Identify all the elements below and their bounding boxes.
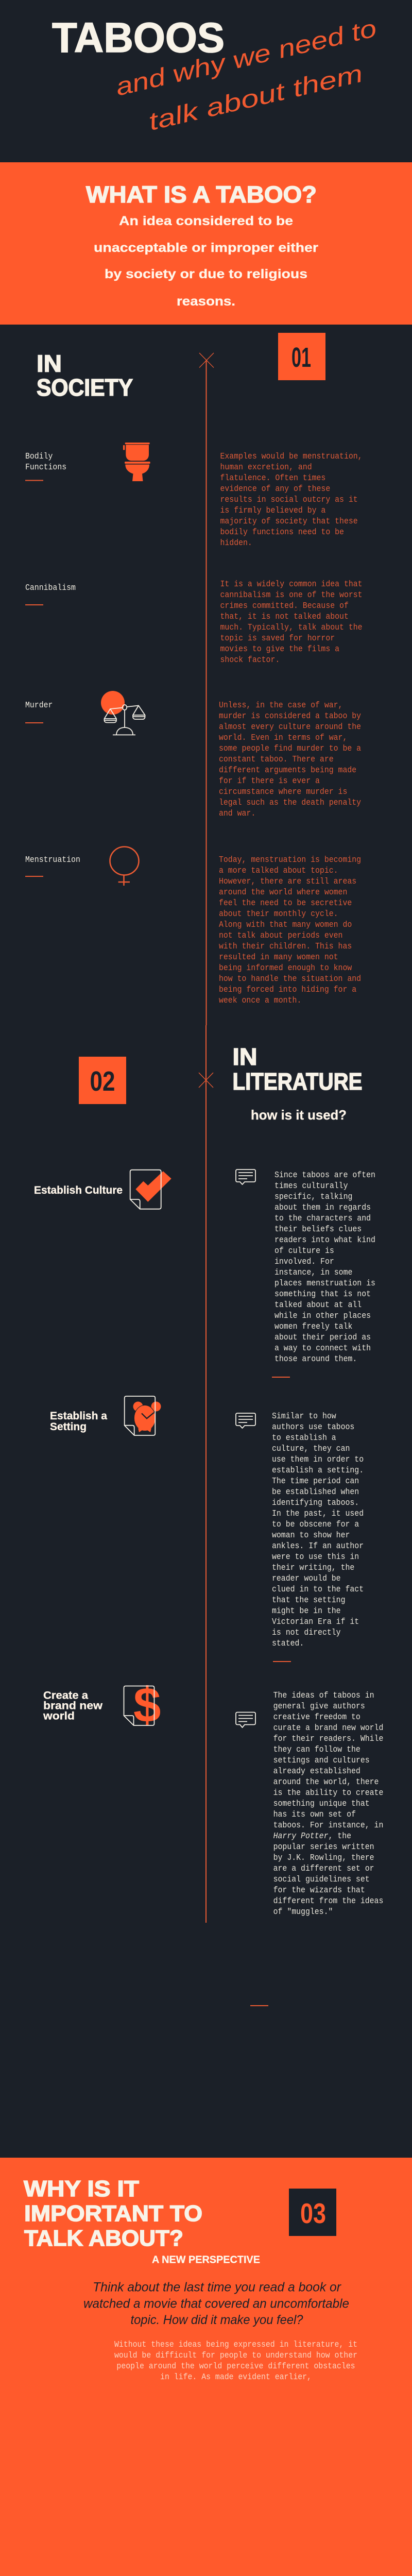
text: create a brand new world: general give authors [273, 1701, 365, 1711]
heading: why is it important: TALK ABOUT? [24, 2226, 183, 2251]
icon: toilet [123, 443, 150, 481]
icon: document with check [130, 1170, 171, 1209]
icon: venus symbol [110, 847, 139, 886]
badge 03 [289, 2189, 336, 2236]
dash [25, 604, 43, 605]
icon: chat bubble 2 [236, 1413, 255, 1428]
text: create a brand new world: for their readers. While [273, 1734, 383, 1743]
label: create a brand new world [43, 1690, 103, 1722]
panel: what is a taboo [0, 162, 412, 325]
title: TABOOS: TABOOS [52, 14, 225, 61]
text: murder: almost every culture around the [219, 722, 361, 732]
label: create a brand new world: Create a [43, 1690, 88, 1701]
text: establish culture: Since taboos are often [274, 1170, 375, 1180]
text: bodily functions: Examples would be menstruation, [220, 451, 363, 461]
badge 02: 02 [90, 1066, 115, 1097]
label: establish culture: Establish Culture [34, 1184, 123, 1196]
text: establish a setting: were to use this in [272, 1552, 359, 1562]
heading: why is it important: WHY IS IT [24, 2176, 139, 2201]
text: establish a setting: might be in the [272, 1606, 341, 1616]
heading: why is it important: IMPORTANT TO [24, 2201, 202, 2226]
label: establish a setting: Establish a [50, 1410, 107, 1422]
text: create a brand new world: taboos. For instance, in [273, 1820, 383, 1830]
text: murder: murder is considered a taboo by [219, 711, 361, 721]
closing text: would be difficult for people to understand how other [114, 2350, 357, 2360]
text: establish a setting: stated. [272, 1638, 304, 1648]
text: create a brand new world: by J.K. Rowling, there [273, 1853, 374, 1862]
text: menstruation: week once a month. [219, 995, 301, 1005]
subheading: how is it used: how is it used? [251, 1107, 347, 1123]
badge 01 [278, 333, 325, 380]
text: menstruation: about their monthly cycle. [219, 909, 338, 919]
text: create a brand new world: is the ability to create [273, 1788, 383, 1798]
text: establish culture: women freely talk [274, 1321, 352, 1331]
text: establish culture: a way to connect with [274, 1343, 371, 1353]
closing text: people around the world perceive different obstacles [116, 2361, 355, 2371]
definition text: by society or due to religious [105, 267, 307, 281]
dash [250, 2005, 268, 2006]
text: menstruation: with their children. This has [219, 941, 352, 951]
text: create a brand new world: of "muggles." [273, 1907, 333, 1917]
text: establish culture: those around them. [274, 1354, 357, 1364]
text: establish a setting: clued in to the fact [272, 1584, 364, 1594]
definition text: reasons. [177, 294, 235, 309]
text: establish culture: of culture is [274, 1246, 334, 1256]
dash [25, 722, 43, 723]
badge 03: 03 [300, 2197, 326, 2229]
subheading: a new perspective: A NEW PERSPECTIVE [152, 2255, 260, 2266]
text: establish a setting: establish a setting. [272, 1465, 364, 1475]
text: bodily functions: bodily functions need to be [220, 527, 344, 537]
text: murder: some people find murder to be a [219, 743, 361, 753]
text: murder: Unless, in the case of war, [219, 700, 342, 710]
text: create a brand new world: different from the ideas [273, 1896, 383, 1906]
label: menstruation: Menstruation [25, 855, 80, 865]
text: cannibalism: much. Typically, talk about the [220, 622, 363, 632]
text: establish a setting: woman to show her [272, 1530, 350, 1540]
text: menstruation: Along with that many women do [219, 920, 352, 929]
timeline vertical line [205, 360, 207, 1923]
text: create a brand new world: , the [328, 1831, 351, 1841]
text: establish culture: talked about at all [274, 1300, 362, 1310]
text: establish culture: while in other places [274, 1311, 371, 1320]
text: create a brand new world: social guidelines set [273, 1874, 370, 1884]
heading: in society: IN [37, 350, 62, 377]
text: create a brand new world: has its own set of [273, 1809, 356, 1819]
text: create a brand new world: curate a brand new world [273, 1723, 383, 1733]
text: establish a setting: The time period can [272, 1476, 359, 1486]
definition text: An idea considered to be [119, 214, 293, 228]
text: murder: world. Even in terms of war, [219, 733, 347, 742]
text: establish a setting: culture, they can [272, 1444, 350, 1453]
icon: chat bubble 3 [236, 1713, 255, 1727]
text: bodily functions: human excretion, and [220, 462, 312, 472]
icon: document with dollar: $ [133, 1677, 161, 1733]
text: bodily functions: evidence of any of these [220, 484, 330, 494]
panel: dark body [0, 325, 412, 2158]
text: menstruation: Today, menstruation is becoming [219, 855, 361, 865]
handwritten question: watched a movie that covered an uncomfortable [83, 2297, 349, 2311]
text: create a brand new world: The ideas of taboos in [273, 1690, 374, 1700]
text: create a brand new world: creative freedom to [273, 1712, 360, 1722]
text: menstruation: However, there are still areas [219, 876, 356, 886]
icon: chat bubble 1 [236, 1170, 255, 1184]
icon: timeline cross 2 [199, 1073, 213, 1088]
text: cannibalism: crimes committed. Because of [220, 601, 349, 611]
label: cannibalism: Cannibalism [25, 583, 76, 592]
text: establish a setting: identifying taboos. [272, 1498, 359, 1507]
text: establish a setting: reader would be [272, 1573, 341, 1583]
text: menstruation: being forced into hiding for a [219, 985, 356, 994]
text: establish culture: places menstruation is [274, 1278, 375, 1288]
text: establish a setting: In the past, it used [272, 1509, 364, 1518]
text: establish culture: their beliefs clues [274, 1224, 362, 1234]
text: bodily functions: results in social outcry as it [220, 495, 358, 504]
text: establish culture: readers into what kind [274, 1235, 375, 1245]
heading: in literature: IN [233, 1043, 258, 1070]
text: establish culture: to the characters and [274, 1213, 371, 1223]
text: menstruation: not talk about periods even [219, 930, 342, 940]
text: establish culture: about them in regards [274, 1202, 371, 1212]
text: create a brand new world: around the world, there [273, 1777, 379, 1787]
text: establish a setting: to establish a [272, 1433, 336, 1443]
label: establish a setting [50, 1410, 107, 1433]
closing text: Without these ideas being expressed in literature, it [114, 2340, 357, 2349]
text: establish a setting: to be obscene for a [272, 1519, 359, 1529]
badge 02 [79, 1057, 126, 1104]
text: menstruation: resulted in many women not [219, 952, 338, 962]
text: menstruation: around the world where women [219, 887, 347, 897]
label: bodily functions: Bodily [25, 451, 53, 461]
handwritten question: topic. How did it make you feel? [131, 2313, 303, 2327]
text: murder: different arguments being made [219, 765, 356, 775]
label: murder: Murder [25, 700, 53, 710]
text: establish culture: instance, in some [274, 1267, 352, 1277]
definition text: unacceptable or improper either [94, 241, 318, 255]
text: establish a setting: use them in order to [272, 1454, 364, 1464]
text: create a brand new world: popular series written [273, 1842, 374, 1852]
heading: what is a taboo: WHAT IS A TABOO? [86, 181, 317, 208]
heading: why is it important [24, 2176, 202, 2251]
text: cannibalism: cannibalism is one of the worst [220, 590, 363, 600]
text: murder: for if there is ever a [219, 776, 320, 786]
text: murder: and war. [219, 808, 255, 818]
icon: document with clock [125, 1396, 161, 1435]
subtitle line 1: and why we need to [113, 15, 379, 101]
subtitle line 2: talk about them [146, 60, 366, 136]
text: establish culture: times culturally [274, 1181, 348, 1191]
text: establish a setting: is not directly [272, 1628, 341, 1637]
text: murder: constant taboo. There are [219, 754, 334, 764]
badge 01: 01 [291, 342, 311, 373]
text: menstruation: a more talked about topic. [219, 866, 338, 875]
text: create a brand new world: for the wizards that [273, 1885, 365, 1895]
text: establish a setting: Victorian Era if it [272, 1617, 359, 1626]
text: bodily functions: is firmly believed by a [220, 505, 325, 515]
panel: title [0, 0, 412, 162]
text: bodily functions: flatulence. Often times [220, 473, 325, 483]
text: establish culture: something that is not [274, 1289, 371, 1299]
text: murder: legal such as the death penalty [219, 798, 361, 807]
dash [25, 876, 43, 877]
text: establish culture: about their period as [274, 1332, 371, 1342]
text: create a brand new world: they can follow the [273, 1744, 360, 1754]
heading: in literature [233, 1043, 363, 1095]
closing text: in life. As made evident earlier, [160, 2372, 312, 2382]
dash [272, 1377, 290, 1378]
icon: scales [101, 691, 145, 735]
text: cannibalism: It is a widely common idea that [220, 579, 363, 589]
text: establish a setting: their writing, the [272, 1563, 354, 1572]
text: establish a setting: authors use taboos [272, 1422, 354, 1432]
text: murder: circumstance where murder is [219, 787, 347, 796]
definition text [94, 214, 318, 309]
icon: timeline cross 1 [199, 353, 214, 368]
text: create a brand new world: are a different set or [273, 1863, 374, 1873]
heading: in literature: LITERATURE [233, 1068, 363, 1095]
dash [273, 1661, 291, 1662]
text: establish a setting: that the setting [272, 1595, 346, 1605]
text: create a brand new world: settings and cultures [273, 1755, 370, 1765]
text: cannibalism: movies to give the films a [220, 644, 339, 654]
text: establish culture: specific, talking [274, 1192, 352, 1201]
text: menstruation: feel the need to be secretive [219, 898, 352, 908]
text: create a brand new world: something unique that [273, 1799, 370, 1808]
dash [25, 480, 43, 481]
heading: in society [37, 350, 133, 401]
handwritten question [83, 2280, 349, 2327]
text: create a brand new world: already established [273, 1766, 360, 1776]
label: bodily functions: Functions [25, 462, 66, 472]
text: establish a setting: be established when [272, 1487, 359, 1497]
text: cannibalism: shock factor. [220, 655, 280, 665]
label: establish a setting: Setting [50, 1421, 87, 1433]
text: cannibalism: topic is saved for horror [220, 633, 335, 643]
text: create a brand new world: Harry Potter [273, 1831, 328, 1841]
heading: in society: SOCIETY [37, 374, 133, 401]
label: create a brand new world: world [43, 1710, 75, 1722]
handwritten question: Think about the last time you read a book or [93, 2280, 342, 2295]
text: establish culture: involved. For [274, 1257, 334, 1266]
text: bodily functions: hidden. [220, 538, 252, 548]
text: cannibalism: that, it is not talked about [220, 612, 349, 621]
text: menstruation: how to handle the situation and [219, 974, 361, 984]
text: establish a setting: Similar to how [272, 1411, 336, 1421]
label: create a brand new world: brand new [43, 1700, 103, 1711]
label: bodily functions [25, 451, 66, 472]
text: menstruation: being informed enough to know [219, 963, 352, 973]
text: establish a setting: ankles. If an author [272, 1541, 364, 1551]
panel: why is it important [0, 2158, 412, 2576]
text: bodily functions: majority of society that these [220, 516, 358, 526]
